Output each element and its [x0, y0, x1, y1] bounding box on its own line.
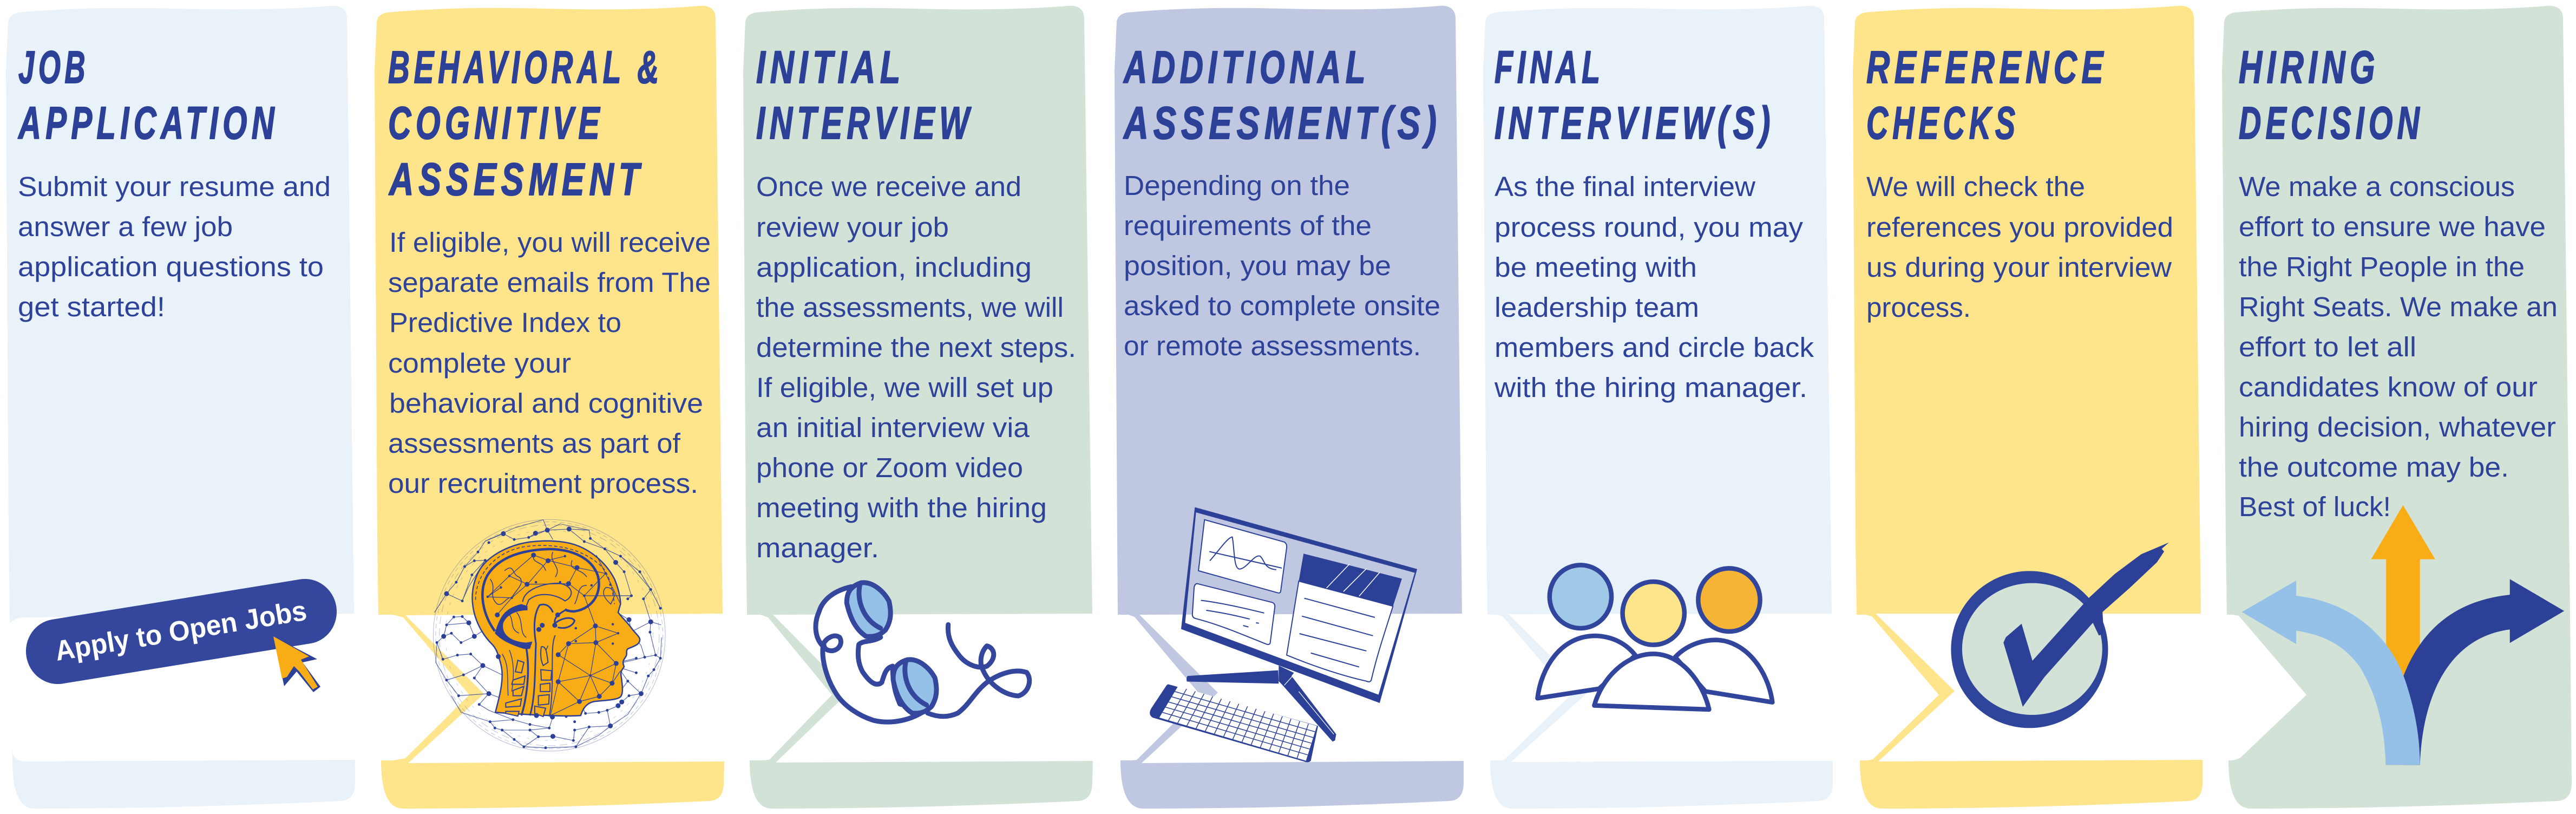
person: right: [1675, 568, 1772, 702]
heading: behavioral and cognitive assesment: BEHAVIORAL &: [388, 42, 663, 93]
icon: three people: [1537, 565, 1772, 709]
body text: additional assesments: or remote assessments.: [1124, 330, 1421, 361]
body text: behavioral and cognitive assesment: behavioral and cognitive: [389, 388, 703, 419]
body text: job application: get started!: [18, 291, 165, 322]
panel: hiring decision: [2222, 6, 2572, 809]
body text: hiring decision: Best of luck!: [2239, 491, 2391, 522]
button: apply to open jobs: [21, 574, 342, 689]
panel background with chevron: [1115, 6, 1464, 809]
person: left: [1537, 565, 1635, 698]
body text: additional assesments: asked to complete onsite: [1124, 290, 1440, 321]
panel: reference checks: [1853, 6, 2203, 809]
body text: job application: [18, 171, 331, 322]
monitor stand: [1187, 666, 1336, 741]
body text: hiring decision: hiring decision, whatever: [2239, 412, 2556, 442]
body text: final interviews: process round, you may: [1495, 212, 1804, 243]
icon: telephone handset: [816, 583, 1030, 722]
heading: initial interview: [756, 42, 974, 148]
body text: initial interview: phone or Zoom video: [756, 452, 1023, 483]
heading: reference checks: [1866, 42, 2108, 148]
heading: behavioral and cognitive assesment: COGNITIVE: [388, 97, 604, 148]
heading: additional assesments: [1123, 42, 1441, 148]
body text: hiring decision: the outcome may be.: [2239, 452, 2509, 483]
body text: final interviews: members and circle back: [1495, 332, 1814, 363]
panel background with chevron: [375, 6, 724, 809]
text window: [1192, 584, 1275, 644]
panel background: job application: [6, 6, 355, 809]
body text: hiring decision: We make a conscious: [2239, 171, 2515, 202]
arrow: right dark blue: [2403, 579, 2564, 765]
body text: additional assesments: Depending on the: [1124, 170, 1350, 201]
heading: hiring decision: HIRING: [2239, 42, 2380, 93]
body text: initial interview: manager.: [756, 532, 879, 563]
body text: initial interview: [756, 171, 1076, 563]
table window: [1287, 581, 1393, 682]
heading: hiring decision: [2239, 42, 2424, 148]
arrow: up orange: [2371, 505, 2435, 765]
handset body: [816, 587, 924, 722]
body text: hiring decision: effort to let all: [2239, 331, 2416, 362]
body text: additional assesments: position, you may be: [1124, 250, 1391, 281]
body text: job application: application questions to: [18, 251, 324, 282]
body text: final interviews: leadership team: [1495, 292, 1699, 323]
heading: reference checks: CHECKS: [1866, 97, 2020, 148]
icon: head with brain in network sphere: [433, 519, 665, 751]
body text: initial interview: an initial interview via: [756, 412, 1030, 443]
panel background with chevron: [743, 6, 1093, 809]
body text: initial interview: meeting with the hiring: [756, 492, 1047, 523]
coiled cord: [928, 624, 1030, 717]
panel background with chevron: [1853, 6, 2203, 809]
panel: job application: [6, 6, 358, 809]
body text: behavioral and cognitive assesment: complete your: [388, 348, 571, 379]
ear loop: [823, 636, 841, 651]
body text: behavioral and cognitive assesment: assessments as part of: [388, 428, 681, 459]
body text: final interviews: be meeting with: [1495, 252, 1697, 283]
heading: final interviews: INTERVIEW(S): [1495, 97, 1775, 148]
head silhouette: [473, 541, 640, 716]
body text: hiring decision: effort to ensure we have: [2239, 211, 2546, 242]
icon: check mark in circle: [1951, 543, 2169, 728]
heading: additional assesments: ADDITIONAL: [1123, 42, 1370, 93]
earpiece upper: [847, 583, 890, 636]
icon: three-way arrows: [2242, 505, 2564, 765]
body text: additional assesments: [1124, 170, 1440, 361]
body text: behavioral and cognitive assesment: If eligible, you will receive: [389, 227, 711, 258]
body text: final interviews: with the hiring manager.: [1494, 372, 1807, 403]
body text: reference checks: references you provided: [1866, 212, 2173, 243]
body text: behavioral and cognitive assesment: [388, 227, 711, 499]
heading: initial interview: INITIAL: [756, 42, 905, 93]
icon: computer monitor and keyboard: [1150, 507, 1417, 762]
monitor frame: [1181, 507, 1417, 703]
heading: job application: JOB: [18, 42, 89, 93]
arrow: left light blue: [2242, 581, 2420, 765]
person: centre: [1594, 582, 1709, 709]
panel: initial interview: [743, 6, 1093, 809]
panel: final interviews: [1483, 6, 1833, 809]
heading: job application: APPLICATION: [18, 97, 279, 148]
heading: additional assesments: ASSESMENT(S): [1123, 97, 1441, 148]
network sphere: [433, 519, 665, 751]
heading: behavioral and cognitive assesment: [388, 42, 663, 205]
body text: reference checks: [1866, 171, 2173, 323]
body text: initial interview: the assessments, we will: [756, 292, 1064, 323]
button: apply to open jobs: Apply to Open Jobs: [53, 595, 309, 667]
white band: [8, 614, 358, 761]
body text: reference checks: process.: [1866, 292, 1971, 323]
heading: initial interview: INTERVIEW: [756, 97, 974, 148]
icon: pixel cursor: [273, 636, 320, 692]
body text: hiring decision: Right Seats. We make an: [2239, 291, 2558, 322]
heading: job application: [18, 42, 279, 148]
body text: hiring decision: [2239, 171, 2558, 522]
panel background with white arrow notch: [2222, 6, 2572, 809]
body text: reference checks: We will check the: [1866, 171, 2085, 202]
panel: additional assesments: [1115, 6, 1464, 809]
body text: initial interview: Once we receive and: [756, 171, 1021, 202]
body text: job application: Submit your resume and: [18, 171, 331, 202]
brain structure: [476, 545, 631, 717]
body text: final interviews: [1494, 171, 1814, 403]
panel: behavioral and cognitive assesment: [375, 6, 724, 809]
body text: additional assesments: requirements of the: [1124, 210, 1372, 241]
body text: behavioral and cognitive assesment: separate emails from The: [388, 267, 711, 298]
heading: final interviews: [1495, 42, 1775, 148]
body text: behavioral and cognitive assesment: our recruitment process.: [388, 468, 698, 499]
heading: behavioral and cognitive assesment: ASSESMENT: [389, 154, 644, 205]
keyboard: [1150, 684, 1318, 762]
body text: job application: answer a few job: [18, 211, 233, 242]
heading: reference checks: REFERENCE: [1866, 42, 2108, 93]
heading: hiring decision: DECISION: [2239, 97, 2424, 148]
body text: hiring decision: the Right People in the: [2239, 251, 2525, 282]
body text: behavioral and cognitive assesment: Predictive Index to: [389, 307, 621, 338]
body text: initial interview: If eligible, we will set up: [756, 372, 1053, 403]
chart window: [1198, 520, 1287, 593]
body text: reference checks: us during your interview: [1866, 252, 2172, 283]
heading: final interviews: FINAL: [1495, 42, 1604, 93]
body text: hiring decision: candidates know of our: [2239, 372, 2538, 402]
panel background with chevron: [1483, 6, 1833, 809]
earpiece lower: [893, 660, 936, 713]
body text: initial interview: determine the next steps.: [756, 332, 1076, 363]
body text: final interviews: As the final interview: [1495, 171, 1755, 202]
body text: initial interview: application, including: [756, 252, 1032, 283]
body text: initial interview: review your job: [756, 212, 949, 243]
